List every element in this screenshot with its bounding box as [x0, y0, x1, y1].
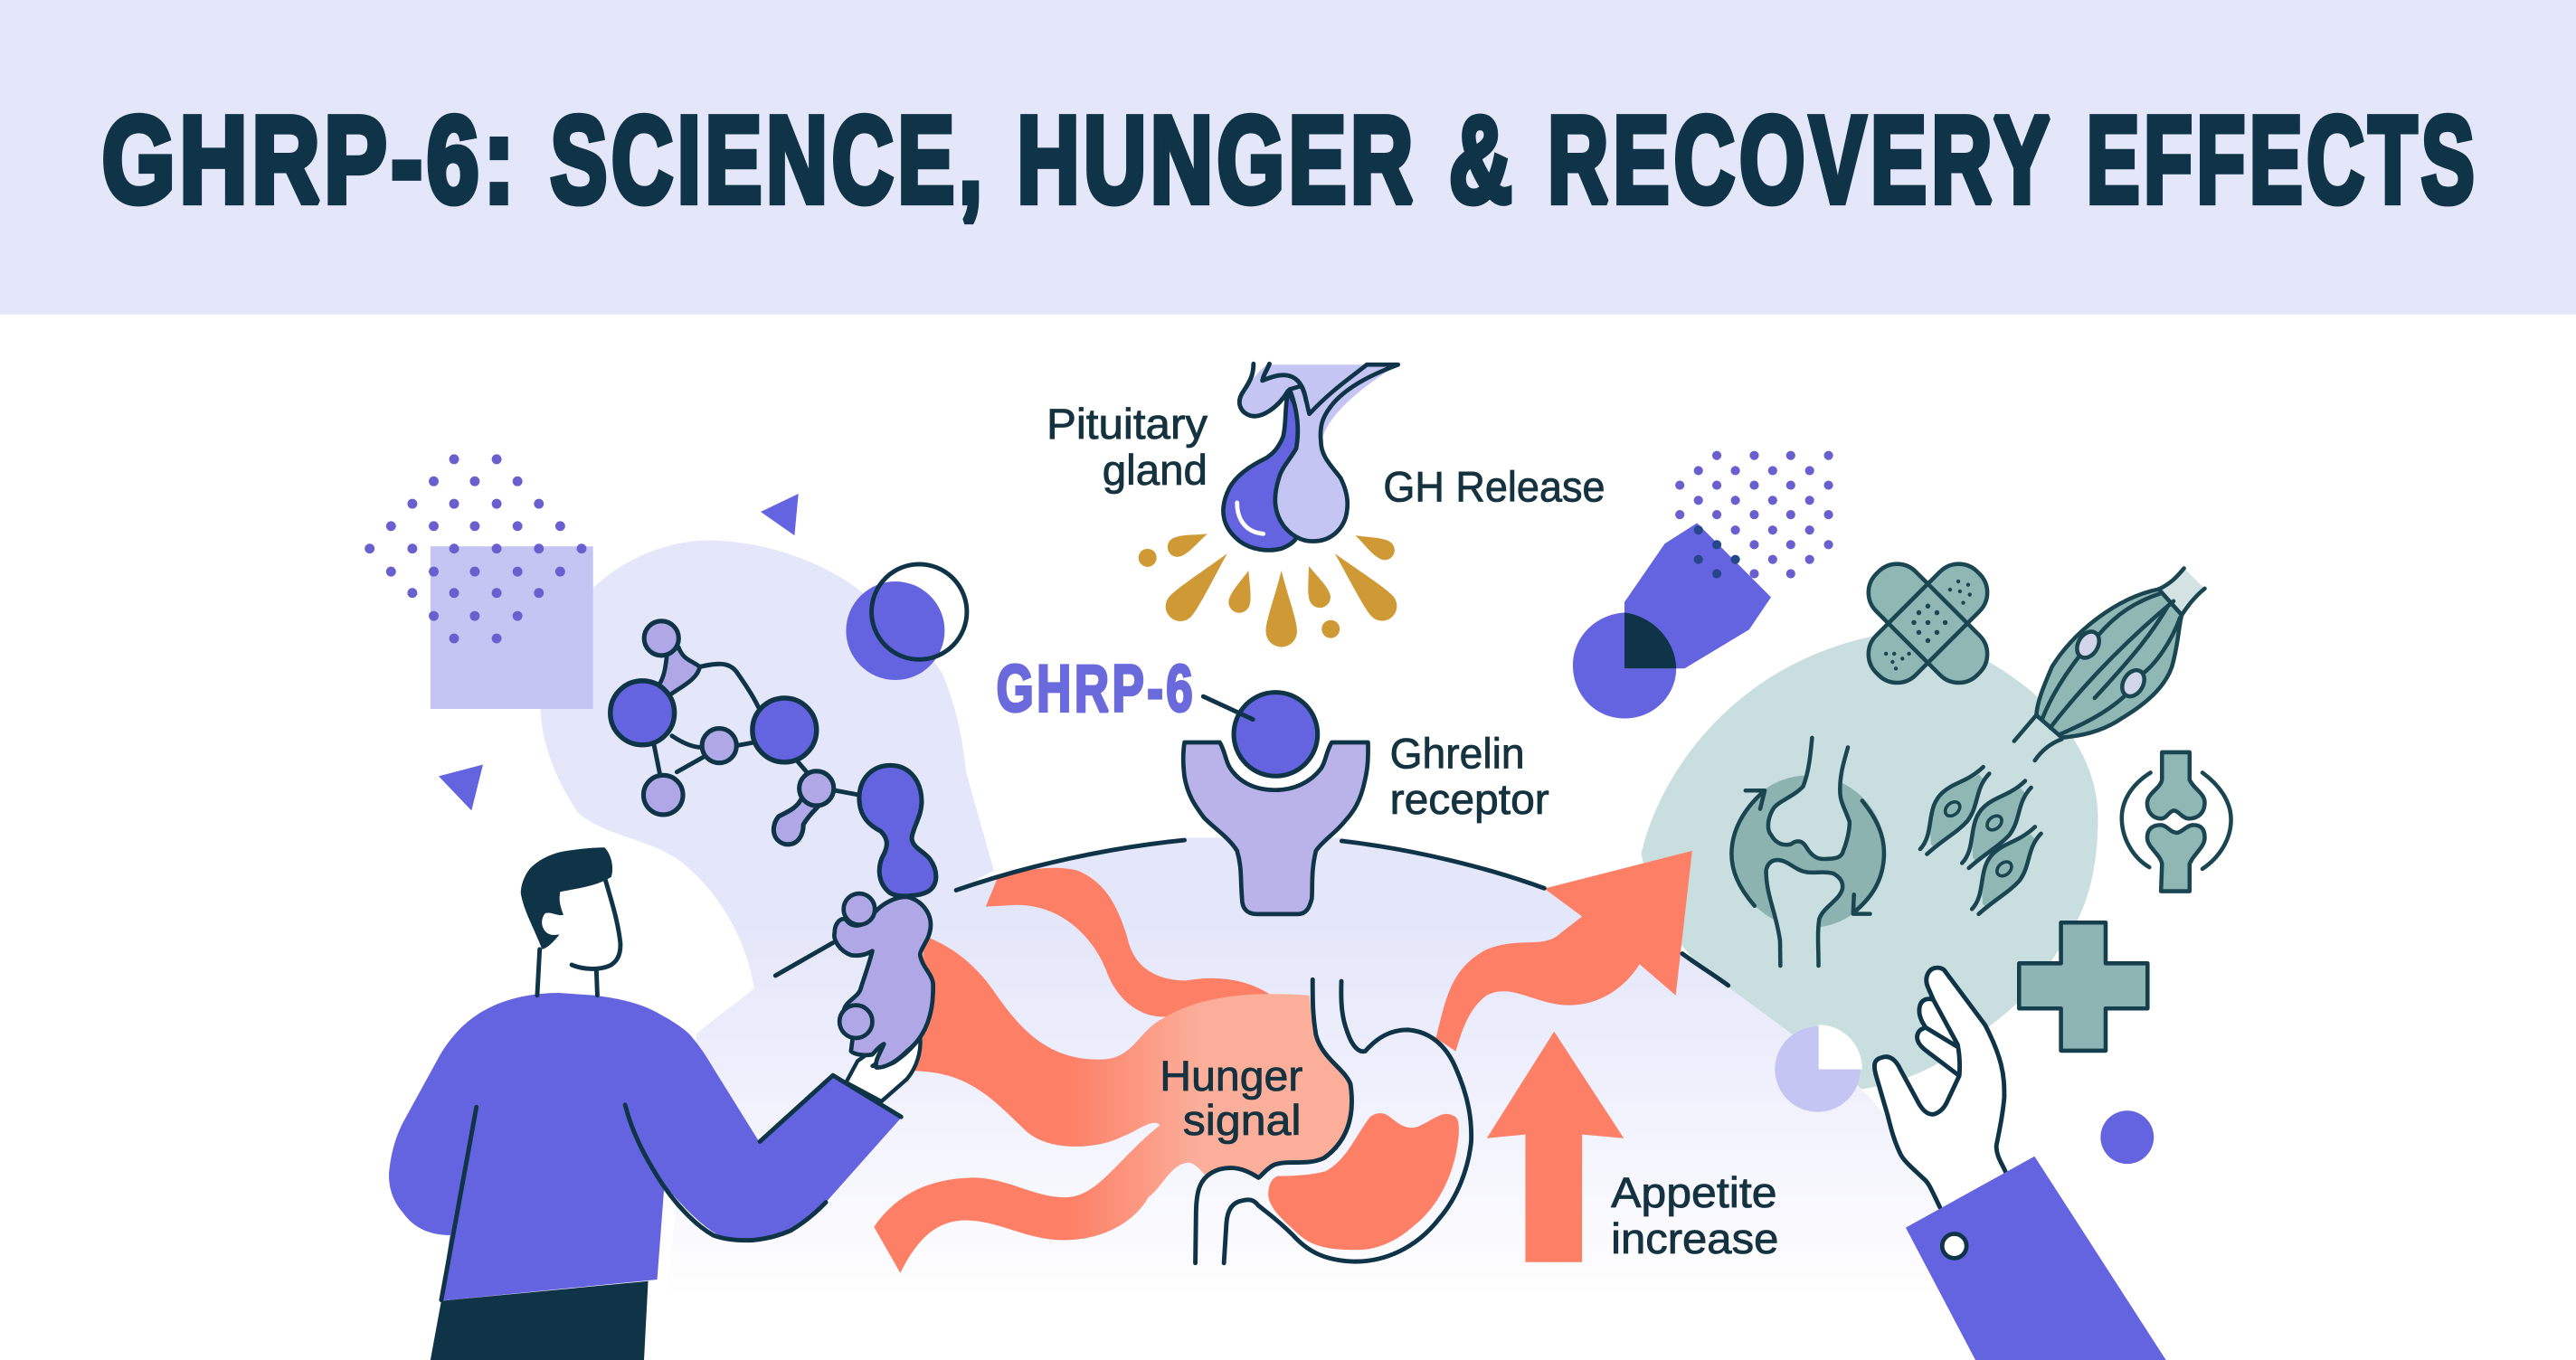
- hand holding blob: [775, 893, 933, 1101]
- wave central and lower: [874, 936, 1352, 1273]
- circle behind capsule: [1573, 613, 1676, 719]
- white quadrant: [1819, 1025, 1862, 1069]
- hunger signal label: [1160, 1053, 1302, 1145]
- femur: [1768, 738, 1850, 859]
- dot pattern left: [365, 454, 586, 643]
- title: EFFECTS: [2087, 91, 2475, 229]
- sweater lines: [441, 1075, 901, 1300]
- ghrelin receptor: [1183, 742, 1368, 914]
- appetite label: increase: [1611, 1215, 1778, 1263]
- light connector: [656, 647, 700, 700]
- icon: medical cross: [2019, 922, 2147, 1051]
- ghrelin receptor label: Ghrelin: [1390, 730, 1525, 778]
- man: [389, 847, 902, 1360]
- peanut atom: [859, 765, 936, 896]
- molecule: [611, 621, 936, 896]
- light purple blob: [834, 897, 933, 1068]
- atoms: [644, 621, 678, 656]
- pie shape: [1775, 1025, 1862, 1112]
- icon: muscle cells: [1902, 760, 2055, 917]
- highlight: [1237, 503, 1264, 534]
- appetite label: [1611, 1169, 1778, 1263]
- sweater: [389, 993, 902, 1301]
- triangle lower: [439, 765, 483, 810]
- trousers: [431, 1281, 649, 1360]
- icon: small joint: [2122, 752, 2231, 892]
- dot pattern right: [1675, 451, 1833, 579]
- fingers: [846, 1036, 920, 1101]
- recovery arrow: [1435, 851, 1692, 1051]
- icon: knee joint: [1731, 738, 1885, 966]
- dark lobe: [1223, 391, 1306, 550]
- lavender square: [431, 546, 593, 709]
- hair: [521, 847, 612, 949]
- pituitary label: [1046, 401, 1208, 495]
- tibia: [1766, 860, 1842, 966]
- cuff button: [1942, 1233, 1966, 1258]
- hand outline: [1874, 968, 2006, 1207]
- header band: [0, 0, 2576, 315]
- sleeve cuff: [1906, 1157, 2166, 1360]
- gh release droplets: [1139, 524, 1403, 647]
- hand fill: [1874, 968, 2006, 1248]
- pituitary label: Pituitary: [1046, 401, 1208, 449]
- icon: bandage: [1858, 553, 1998, 694]
- stomach outline: [1196, 979, 1472, 1263]
- capsule shape: [1624, 523, 1771, 668]
- cell membrane arcs: [956, 840, 1728, 986]
- title: [102, 90, 2475, 229]
- pituitary gland: [1223, 364, 1398, 550]
- pointer line: [1203, 696, 1253, 720]
- title: HUNGER: [1017, 90, 1413, 228]
- hunger signal waves: [874, 868, 1352, 1273]
- neck and face: [537, 877, 620, 996]
- pituitary label: gland: [1103, 447, 1208, 495]
- wave upper: [986, 868, 1272, 1016]
- probe line: [775, 943, 833, 976]
- ghrelin receptor label: [1390, 730, 1549, 824]
- circle with outline: [846, 564, 967, 680]
- gh release label: GH Release: [1383, 464, 1605, 512]
- background blob: lavender body area: [540, 541, 1955, 1314]
- title: &: [1449, 91, 1512, 229]
- stomach: [1196, 979, 1472, 1263]
- ghrelin receptor label: receptor: [1390, 776, 1549, 824]
- stalk outline: [1239, 364, 1306, 416]
- light lobe: [1275, 364, 1398, 542]
- rotation arrows: [1731, 790, 1884, 914]
- molecule bonds: [654, 664, 859, 795]
- triangle top: [761, 494, 799, 535]
- icon: muscle: [2014, 568, 2205, 760]
- outstretched hand: [1874, 968, 2006, 1248]
- dark overlap: [1624, 613, 1676, 668]
- title: SCIENCE,: [550, 90, 982, 229]
- purple circle: [2100, 1110, 2154, 1164]
- title: RECOVERY: [1548, 90, 2050, 229]
- stomach contents: [1268, 1113, 1459, 1250]
- hunger signal label: Hunger: [1160, 1053, 1302, 1100]
- ghrp-6 label: GHRP-6: [997, 651, 1193, 726]
- appetite arrow: [1487, 1032, 1624, 1262]
- title: GHRP-6:: [102, 90, 515, 229]
- appetite label: Appetite: [1611, 1169, 1777, 1217]
- teal circle: [1732, 775, 1885, 928]
- gland stalk: [1238, 364, 1398, 449]
- hunger signal label: signal: [1183, 1097, 1302, 1145]
- ghrp-6 molecule in receptor: [1203, 693, 1318, 776]
- background blob: recovery green: [1642, 631, 2098, 1089]
